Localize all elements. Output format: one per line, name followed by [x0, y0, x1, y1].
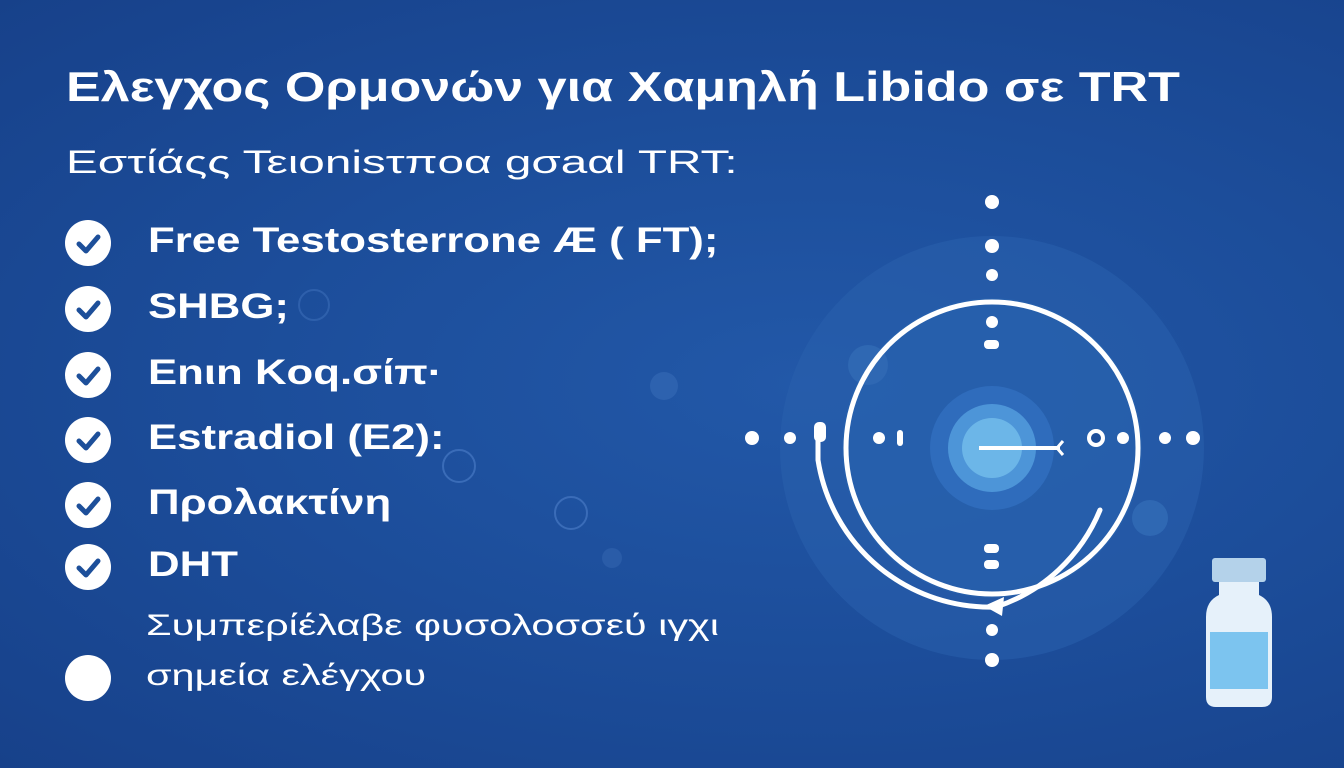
checklist: DHT	[148, 545, 238, 584]
item: SHBG	[65, 286, 289, 332]
note text 2: σημεία ελέγχου	[146, 659, 426, 692]
checklist	[65, 220, 719, 701]
icon: vial	[1206, 558, 1272, 707]
note circle	[65, 655, 111, 701]
note text: Συμπερίέλαβε φυσολοσσεύ ιγχι	[146, 609, 719, 642]
checklist: SHBG;	[148, 287, 289, 326]
item: Free Testosterone	[65, 220, 718, 266]
item: Prolactin	[65, 482, 391, 528]
item: Enin	[65, 352, 442, 398]
item: Estradiol	[65, 417, 445, 463]
item: DHT	[65, 544, 238, 590]
checklist: Enιn Koq.σίπ·	[148, 353, 442, 392]
checklist: Προλακτίνη	[148, 483, 391, 522]
title: Ελεγχος Ορμονών για Χαμηλή Libido σε TRT	[66, 63, 1180, 110]
target diagram	[745, 195, 1204, 667]
subtitle: Εστίάςς Τειοnisτπoα gσaαl TRT:	[66, 144, 738, 180]
checklist: Free Testosterrone Æ ( FT);	[148, 221, 718, 260]
checklist: Estradiol (E2):	[148, 418, 445, 457]
